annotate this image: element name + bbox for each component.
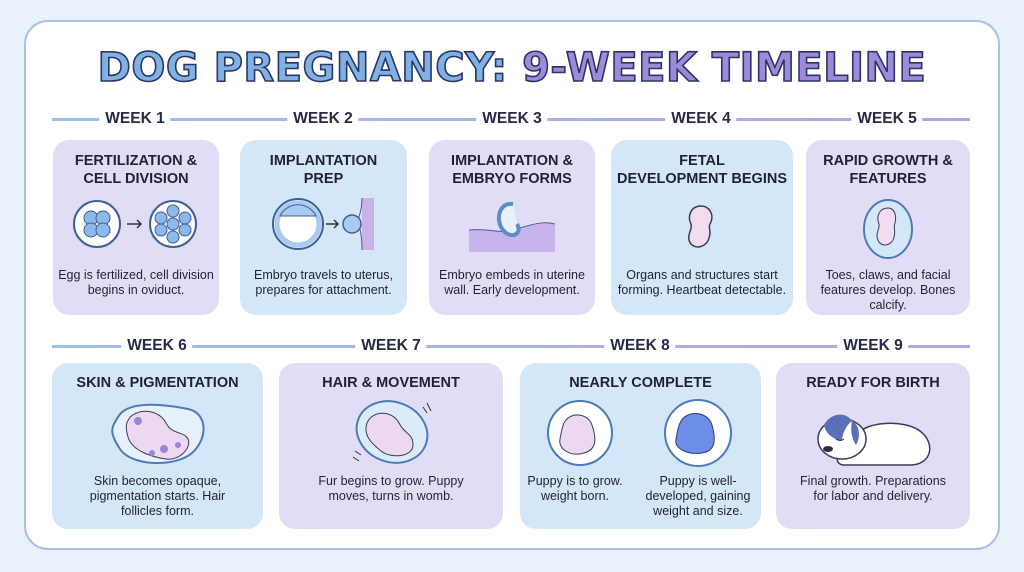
card week 8: developed, gaining: [646, 489, 750, 503]
card week 2: Embryo travels to uterus,: [254, 268, 393, 282]
card week 3: EMBRYO FORMS: [452, 171, 572, 187]
week 4 label: WEEK 4: [671, 110, 731, 127]
card week 3: Embryo embeds in uterine: [439, 268, 585, 282]
card week 6: SKIN & PIGMENTATION: [76, 375, 239, 391]
card week 4: DEVELOPMENT BEGINS: [617, 171, 787, 187]
card week 7: [279, 363, 503, 529]
card week 8: weight and size.: [653, 504, 743, 518]
card week 1: [53, 140, 219, 315]
card week 6: [52, 363, 263, 529]
week 9 label: WEEK 9: [843, 337, 903, 354]
card week 9: for labor and delivery.: [813, 489, 933, 503]
card week 9: Final growth. Preparations: [800, 474, 946, 488]
icon: sleeping puppy: [817, 414, 930, 466]
card week 3: wall. Early development.: [444, 283, 580, 297]
icon: embedding embryo: [469, 202, 555, 252]
card week 1: Egg is fertilized, cell division: [58, 268, 214, 282]
icon: pigmented fetus: [111, 404, 205, 464]
card week 9: [776, 363, 970, 529]
title: DOG PREGNANCY: 9-WEEK TIMELINE: [98, 45, 926, 91]
card week 7: Fur begins to grow. Puppy: [318, 474, 464, 488]
card week 4: [611, 140, 793, 315]
card week 5: RAPID GROWTH &: [823, 153, 953, 169]
card week 4: Organs and structures start: [626, 268, 778, 282]
week 5 label: WEEK 5: [857, 110, 917, 127]
week 2 label: WEEK 2: [293, 110, 353, 127]
card week 5: Toes, claws, and facial: [825, 268, 951, 282]
card week 2: PREP: [304, 171, 343, 187]
card week 5: FEATURES: [849, 171, 927, 187]
card week 5: calcify.: [869, 298, 907, 312]
card week 6: pigmentation starts. Hair: [90, 489, 225, 503]
card week 5: features develop. Bones: [821, 283, 955, 297]
card week 6: follicles form.: [121, 504, 194, 518]
card week 9: READY FOR BIRTH: [806, 375, 940, 391]
card week 8: Puppy is well-: [659, 474, 737, 488]
card week 8: NEARLY COMPLETE: [569, 375, 712, 391]
card week 2: IMPLANTATION: [270, 153, 377, 169]
week 3 label: WEEK 3: [482, 110, 542, 127]
card week 7: HAIR & MOVEMENT: [322, 375, 460, 391]
card week 1: begins in oviduct.: [88, 283, 184, 297]
week 7 label: WEEK 7: [361, 337, 421, 354]
card week 4: forming. Heartbeat detectable.: [618, 283, 786, 297]
icon: two puppies in sacs: [547, 399, 732, 467]
week 6 label: WEEK 6: [127, 337, 187, 354]
card week 1: FERTILIZATION &: [75, 153, 197, 169]
card week 8: Puppy is to grow.: [527, 474, 623, 488]
card week 1: CELL DIVISION: [83, 171, 189, 187]
card week 6: Skin becomes opaque,: [94, 474, 221, 488]
card week 3: IMPLANTATION &: [451, 153, 573, 169]
card week 8: [520, 363, 761, 529]
card week 2: prepares for attachment.: [255, 283, 392, 297]
icon: blastocyst: [272, 198, 374, 250]
week 1 label: WEEK 1: [105, 110, 165, 127]
icon: cell division: [73, 200, 197, 248]
icon: moving puppy fetus: [352, 400, 432, 464]
card week 8: weight born.: [541, 489, 609, 503]
card week 7: moves, turns in womb.: [328, 489, 454, 503]
week 8 label: WEEK 8: [610, 337, 670, 354]
icon: early fetus: [688, 205, 713, 248]
card week 2: [240, 140, 407, 315]
card week 4: FETAL: [679, 153, 725, 169]
card week 5: [806, 140, 970, 315]
icon: fetus in sac: [863, 199, 913, 259]
card week 3: [429, 140, 595, 315]
